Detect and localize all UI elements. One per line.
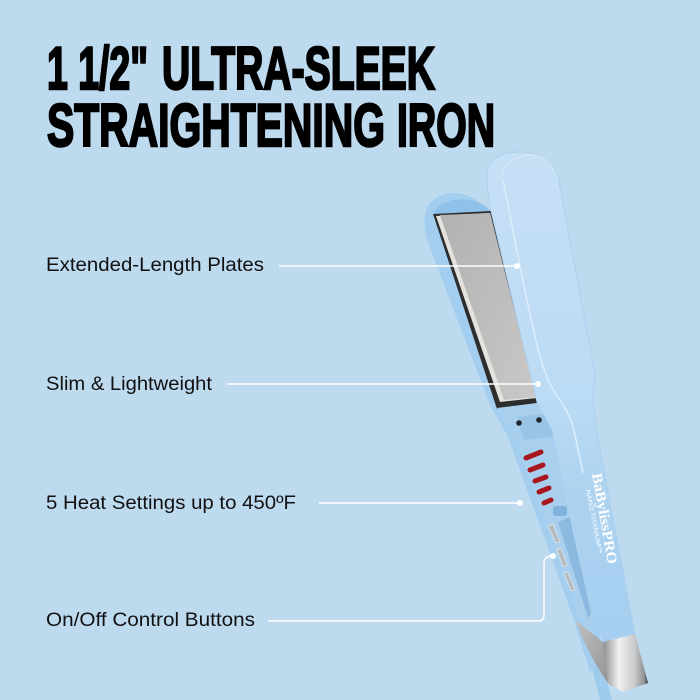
- callout: extended-length plates: Extended-Length Plates: [46, 255, 264, 276]
- brand logo: NANO TITANIUM™: [584, 489, 603, 554]
- heat setting indicators: [526, 452, 551, 503]
- title: 1 1/2": [47, 35, 148, 102]
- groove: [558, 517, 592, 618]
- metal clip: [575, 620, 648, 692]
- front arm highlight: [503, 180, 583, 473]
- slider: [553, 506, 567, 516]
- product illustration: flat iron: [46, 152, 648, 700]
- control panel: [497, 403, 595, 640]
- callout: heat settings: 5 Heat Settings up to 450ºF: [46, 493, 296, 514]
- back arm top shade: [433, 199, 491, 214]
- back arm: [425, 193, 604, 672]
- heating plate: [433, 211, 537, 409]
- title: IRON: [397, 92, 495, 159]
- callout: extended-length plates: [46, 255, 520, 276]
- callout: control buttons: [46, 553, 556, 631]
- callout: heat settings: [46, 493, 523, 514]
- callout: slim and lightweight: Slim & Lightweight: [46, 374, 213, 395]
- handle bottom: [590, 660, 612, 700]
- front arm top shading: [502, 155, 558, 180]
- callout: slim and lightweight: [46, 374, 541, 395]
- title: ULTRA-SLEEK: [162, 35, 435, 102]
- brand logo: BaBylissPRO: [588, 472, 620, 565]
- vents: [516, 420, 522, 426]
- callout: control buttons: On/Off Control Buttons: [46, 610, 255, 631]
- front arm: [487, 152, 635, 642]
- title: STRAIGHTENING: [47, 92, 385, 159]
- title: [47, 35, 495, 159]
- control buttons: [548, 524, 575, 591]
